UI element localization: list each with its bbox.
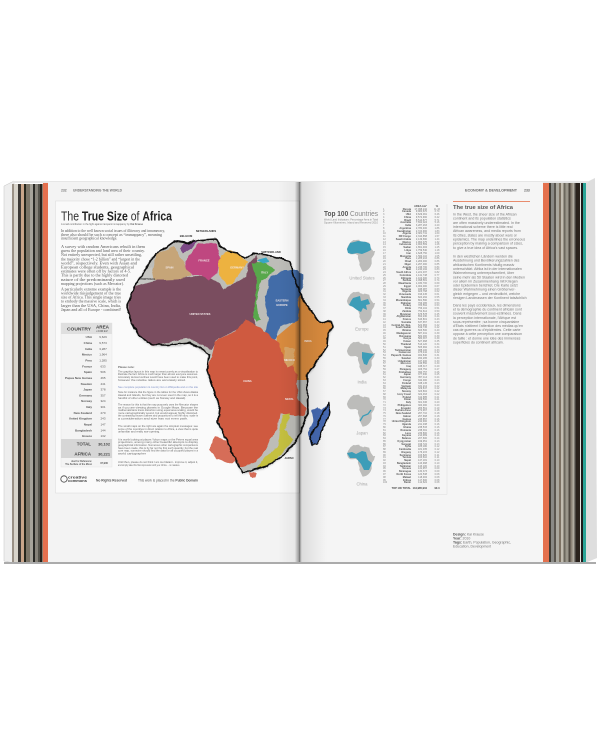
- intro serif text: insufficient geographical knowledge.: [61, 236, 117, 240]
- article heading: The true size of Africa: [453, 205, 514, 211]
- orange rule: [453, 200, 530, 203]
- right page: [301, 182, 543, 562]
- table text: Italy: [86, 405, 92, 409]
- article text: German: dieser Wahrnehmung einen Größenver-: [453, 288, 516, 292]
- please note body text: It is worth looking at places Yukon maps or the Peters equal area: [118, 437, 198, 441]
- please note body text: mathematicians know distortion using equal area scaling, would be: [118, 408, 198, 412]
- top 100 heading: [324, 211, 379, 225]
- data table column headers and frame: 90.3: [434, 486, 440, 490]
- table text: Sweden: [81, 382, 92, 386]
- table text: Germany: [79, 393, 92, 397]
- table background: [61, 323, 112, 467]
- right page edges: stacked page block: [549, 183, 583, 562]
- total band: [61, 439, 112, 458]
- Belgium and Netherlands: [180, 242, 197, 253]
- table text: COUNTRY: [67, 326, 92, 332]
- footer: creative commons: [61, 475, 198, 483]
- left page: [48, 182, 299, 562]
- data table: country names column: Russia Canada USA China Brazil Australia India Argentina Kazakhstan Algeria DR Congo Saudi Arabia Mexico Indonesia Sudan Libya Iran Mongolia Peru Chad Niger Angola Mali South Africa Colombia Ethiopia Bolivia Mauritania Egypt Tanzania Nigeria Venezuela Namibia Mozambique Pakistan Turkey Chile Zambia Myanmar Afghanistan France Somalia Central Afr. Rep. South Sudan Ukraine Madagascar Botswana Kenya Yemen Thailand Spain Turkmenistan Cameroon Papua N. Guinea Sweden Uzbekistan Morocco Iraq Paraguay Zimbabwe Japan Germany Congo Finland Vietnam Malaysia Norway Ivory Coast Poland Oman Italy Philippines Ecuador Burkina Faso New Zealand Gabon Guinea United Kingdom Uganda Ghana Romania Laos Guyana Belarus Kyrgyzstan Senegal Syria Cambodia Uruguay Suriname Tunisia Nepal Bangladesh Tajikistan Greece Nicaragua North Korea Malawi Eritrea Benin: [391, 208, 411, 484]
- article text: French: d'États n'attirent l'attention des médias qu'en: [453, 323, 523, 328]
- article text: French: de taille : et donne une idée des immenses: [453, 336, 521, 340]
- article text: German: afrikanischen Kontinents häufig massiv: [453, 263, 515, 267]
- table text: AFRICA: [74, 452, 92, 456]
- table text: New Zealand: [74, 411, 92, 415]
- article text: French: la perception internationale, l'Afrique est: [453, 316, 516, 320]
- article text: German: vor allem im Zusammenhang mit Kriegen: [453, 279, 518, 283]
- map labels: SPAIN: [165, 266, 174, 270]
- table text: Papua New Guinea: [65, 376, 92, 380]
- main map: Africa with countries overlaid: [127, 229, 340, 477]
- please note body text: however the relative ratios are accurately sized.: [118, 378, 186, 382]
- top 100 heading: Top 100 Countries: [324, 211, 378, 218]
- please note body text: illustrate the fact: Africa is much larger than almost everyone assumes.: [118, 372, 198, 376]
- article text: French: Dans les pays occidentaux, les dimensions: [453, 304, 521, 308]
- please note body text: The small maps on the right are again the simplest messages: see: [118, 424, 198, 428]
- article text: German: unterschätzt. Afrika ist in der internationalen: [453, 267, 522, 271]
- poster title: A small contribution in the fight against rampant immappancy by Kai Krause: [61, 222, 143, 226]
- please note body text: have been made, this is by far not the first such quantity, but the real: [118, 446, 198, 450]
- table text: Nepal: [84, 422, 92, 426]
- map labels: INDIA: [304, 339, 312, 343]
- data table column headers and frame: [392, 204, 447, 494]
- Mexico: [209, 437, 237, 463]
- table text: 1,964: [99, 353, 107, 357]
- article text: German: riesigen Landmassen der Kontinent tatsächlich: [453, 296, 527, 300]
- table text: 243: [100, 417, 106, 421]
- article text: French: superficies du continent africain.: [453, 340, 504, 344]
- credits: Tags: Earth, Population, Geographic,: [453, 540, 511, 544]
- right orange page band: [543, 183, 549, 562]
- article text: English: perception by making a comparison of sizes,: [453, 242, 523, 246]
- article text: German: seine mehr als 50 Staaten wird in den Medien: [453, 275, 525, 279]
- table text: Bangladesh: [75, 428, 92, 432]
- map labels: ITALY: [261, 270, 268, 274]
- please note body text: some of the countries in direct relation to Africa, a view that is quite: [118, 427, 198, 431]
- country area table: [61, 323, 112, 467]
- article text: German: Wahrnehmung unterrepräsentiert, über: [453, 271, 515, 275]
- article text: English: African awareness, and media reports from: [453, 229, 521, 233]
- top 100 heading: World Land Indicators: Percentage Area in Total: [324, 218, 378, 222]
- left page edges: stacked page block: [12, 184, 44, 562]
- right teal page band: [583, 183, 586, 562]
- credits: Year: 2010: [453, 536, 470, 540]
- main map: Africa with countries overlaid: JAPAN: [285, 456, 294, 460]
- intro serif text: European college students, geographical: [61, 266, 134, 270]
- article text: English: to give a true idea of Africa's vast spaces.: [453, 246, 518, 250]
- New Zealand: [248, 473, 257, 477]
- intro serif text: nature of the predominantly used: [61, 278, 125, 282]
- intro serif text: [61, 229, 165, 312]
- Africa base fill: [127, 239, 333, 473]
- data table: rank column: 1 2 3 4 5 6 7 8 9 10 11 12 13 14 15 16 17 18 19 20 21 22 23 24 25 26 27 28 29 30 31 32 33 34 35 36 37 38 39 40 41 42 43 44 45 46 47 48 49 50 51 52 53 54 55 56 57 58 59 60 61 62 63 64 65 66 67 68 69 70 71 72 73 74 75 76 77 78 79 80 81 82 83 84 85 86 87 88 89 90 91 92 93 94 95 96 97 98 99 100: [383, 208, 387, 484]
- table text: 9,629: [99, 335, 107, 339]
- Spain: [152, 246, 192, 280]
- China: [207, 319, 307, 467]
- please note body text: projections, among many other beautiful attempts to display: [118, 440, 199, 444]
- data table column headers and frame: %: [436, 204, 439, 208]
- data table column headers and frame: AREA km²: [414, 204, 427, 208]
- table text: France: [82, 364, 92, 368]
- Sweden, Norway and others: [283, 347, 295, 368]
- table text: AREA: [96, 324, 110, 330]
- map labels: EUROPE: [276, 303, 288, 307]
- map labels: EASTERN: [276, 298, 288, 302]
- small map: China: [347, 445, 375, 486]
- table text: 357: [100, 393, 106, 397]
- small map: India: India: [357, 380, 367, 384]
- map labels: FRANCE: [198, 258, 210, 262]
- right page running header: 233: [524, 188, 530, 192]
- table text: Greece: [82, 434, 92, 438]
- data table column headers and frame: 134,985,904: [413, 486, 428, 490]
- intro serif text: there also should be such a concept as “immappacy”, meaning: [61, 232, 162, 238]
- Switzerland: [257, 257, 269, 263]
- small map: Japan: [347, 395, 375, 436]
- creative commons logo: [61, 475, 88, 483]
- table text: 633: [100, 364, 106, 368]
- please note body text: Until then, please do not think I am too blatant - improve it, adjust it,: [118, 460, 198, 464]
- intro serif text: the majority chose “1-2 billion” and “largest in the: [61, 256, 140, 261]
- article text: French: sous-représentée ; sa bonne cinquantaine: [453, 320, 519, 324]
- please note body text: Accurately derived outlines would have been used to make this point,: [118, 375, 198, 379]
- main map: Africa with countries overlaid: PORTUGAL: [140, 277, 156, 281]
- intro serif text: This is partly due to the highly distorted: [61, 274, 128, 278]
- please note body text: more cartographically sound, but would appear highly distorted.: [118, 411, 198, 415]
- article text: English: are often massively underestimated. In the: [453, 221, 520, 225]
- table text: Japan: [83, 388, 92, 392]
- please note body text: handful of other entities (such as Norway and Hawaii).: [118, 396, 186, 400]
- article text: French: et la démographie du continent africain sont: [453, 308, 522, 312]
- intro serif text: worldwide misjudgement of the true: [61, 292, 121, 296]
- top 100 heading: Square Kilometres, Inland and Reserved 2010: [324, 222, 379, 225]
- table text: Norway: [81, 399, 92, 403]
- map labels: [165, 258, 312, 401]
- please note body text: the contrasting known outlines and proportions to tell the story: scale is: [118, 414, 199, 418]
- table text: 30,221: [98, 452, 111, 456]
- Germany: [218, 250, 248, 285]
- please note body text: See complete population & country list on Wikipedia and on the site: [118, 385, 198, 389]
- Portugal: [134, 267, 153, 287]
- table text: Spain: [84, 370, 92, 374]
- table text: The Surface of the Moon: [65, 463, 93, 466]
- Madagascar island countries: [308, 403, 331, 445]
- map labels: CHINA: [243, 379, 252, 383]
- please note body text: geographical information. Numerous other cartographic comparisons: [118, 443, 199, 447]
- small map: Europe: Europe: [355, 326, 369, 332]
- Eastern Europe: [265, 270, 303, 348]
- table text: 37,900: [100, 461, 109, 465]
- main map: Africa with countries overlaid: BELGIUM: [180, 234, 193, 238]
- table text: 1,285: [99, 358, 107, 362]
- poster title: The True Size of Africa: [61, 210, 173, 224]
- intro serif text: larger than the USA, China, India,: [61, 304, 121, 309]
- small map: India: [347, 342, 375, 384]
- table text: India: [85, 347, 92, 351]
- book gutter shadow, right side: [299, 182, 327, 562]
- please note body text: Hawaii and Islands, but they are not even used in the map, so it is a: [118, 393, 198, 397]
- table text: x 1000 km²: [96, 329, 108, 333]
- book cover and page block: [4, 178, 597, 564]
- table text: USA: [86, 335, 93, 339]
- table text: United Kingdom: [69, 417, 92, 421]
- please note body text: The reason for this is that the map purposely uses the Mercator shapes: [118, 402, 199, 406]
- table text: 132: [100, 434, 106, 438]
- footer: creative commons: This work is placed in the Public Domain: [138, 478, 198, 482]
- table text: 378: [100, 388, 106, 392]
- table text: 441: [100, 382, 106, 386]
- intro serif text: guess the population and land area of their country.: [61, 249, 145, 253]
- article text: German: gleich entgegen – und verdeutlicht, welche: [453, 292, 520, 296]
- map labels: GERMANY: [230, 266, 244, 270]
- article text: English: international scheme there is little real: [453, 225, 513, 229]
- please note body text: The graphics layout in this map is meant purely as a visualization to: [118, 369, 198, 373]
- map labels: NEPAL: [285, 397, 294, 401]
- creative commons logo: commons: [68, 478, 88, 483]
- article text: French: [453, 304, 523, 344]
- Peru: [257, 413, 293, 468]
- table text: 506: [100, 370, 106, 374]
- book gutter shadow, left side: [278, 182, 299, 562]
- table text: Mexico: [82, 353, 92, 357]
- please note body text: Note for instance that the figure in the tables for the USA shows Alaska: [118, 390, 198, 394]
- table text: 324: [100, 399, 106, 403]
- article text: English: epidemics. The map underlines the erroneous: [453, 238, 525, 242]
- article text: English: its cities, states are mostly about wars or: [453, 233, 518, 237]
- left page running header: 232: [61, 188, 67, 192]
- table header band: [61, 323, 112, 334]
- footer: creative commons: No Rights Reserved: [96, 478, 127, 482]
- intro serif text: Not entirely unexpected, but still rather unsettling,: [61, 253, 142, 258]
- please note body text: Please note:: [118, 365, 135, 369]
- right page running header: ECONOMY & DEVELOPMENT: [465, 188, 518, 192]
- intro serif text: In addition to the well known social issues of illiteracy and innumeracy,: [61, 229, 165, 234]
- article text: English: In the West, the sheer size of the African: [453, 212, 517, 216]
- intro serif text: world”, respectively. Even with Asian and: [61, 261, 137, 266]
- India clipped to the outline: [276, 295, 333, 380]
- intro serif text: mapping projections (such as Mercator).: [61, 282, 124, 286]
- article text: German: oder Epidemien berichtet. Die Karte setzt: [453, 284, 518, 288]
- data table column headers and frame: TOP 100 TOTAL: [392, 486, 411, 490]
- credits: Design: Kai Krause: [453, 532, 484, 536]
- table text: 9,573: [99, 341, 107, 345]
- article text: French: oppose à cette perception une comparaison: [453, 332, 522, 336]
- please note body text: and simply take this first-impression with you: Africa ... is massive.: [118, 463, 180, 467]
- data table: percent column: 11.46 6.70 6.46 6.42 5.71 5.16 2.20 1.86 1.83 1.60 1.57 1.44 1.32 1.28 1.25 1.18 1.09 1.05 0.86 0.86 0.85 0.84 0.83 0.82 0.77 0.74 0.74 0.69 0.67 0.63 0.62 0.61 0.55 0.54 0.53 0.53 0.51 0.50 0.45 0.44 0.43 0.43 0.42 0.42 0.40 0.39 0.39 0.39 0.35 0.34 0.34 0.33 0.32 0.31 0.30 0.30 0.30 0.29 0.27 0.26 0.25 0.24 0.23 0.23 0.22 0.22 0.22 0.22 0.21 0.21 0.20 0.20 0.19 0.18 0.18 0.18 0.16 0.16 0.16 0.16 0.16 0.16 0.14 0.14 0.13 0.13 0.12 0.12 0.12 0.11 0.11 0.10 0.10 0.10 0.09 0.09 0.08 0.08 0.08 0.08: [434, 208, 440, 484]
- small map: China: China: [357, 482, 368, 486]
- intro serif text: A particularly extreme example is the: [61, 287, 121, 291]
- please note body text: world cartographer: [118, 451, 146, 455]
- country shapes: [127, 239, 333, 477]
- intro serif text: size of Africa. This single image tries: [61, 296, 122, 300]
- left orange page band: [43, 183, 48, 562]
- article text: German: [453, 254, 527, 300]
- table text: 465: [100, 376, 106, 380]
- printed poster panel: [56, 201, 300, 493]
- Madagascar outline: [311, 403, 331, 445]
- table text: 3,287: [99, 347, 107, 351]
- intro serif text: Japan and all of Europe - combined!: [61, 308, 121, 312]
- credits: [453, 532, 511, 548]
- small map: Japan: Japan: [356, 430, 368, 436]
- main map: Africa with countries overlaid: SWITZERLAND: [261, 250, 281, 254]
- article text: English: [453, 212, 525, 250]
- table text: 30,102: [98, 442, 111, 446]
- France: [185, 243, 220, 280]
- left page running header: UNDERSTANDING THE WORLD: [73, 188, 123, 192]
- table text: [65, 324, 111, 466]
- small map: United States: [347, 240, 375, 280]
- table text: 270: [100, 411, 106, 415]
- United States: [128, 255, 263, 350]
- Italy: [252, 262, 275, 322]
- table text: 144: [100, 428, 106, 432]
- article text: German: In den westlichen Ländern werden die: [453, 254, 513, 258]
- intro serif text: estimates were often off by factors of 4-5.: [61, 270, 131, 274]
- map labels: MEXICO: [284, 358, 295, 362]
- please note body text: as if you are viewing planets in Google Maps. Because the: [118, 405, 198, 409]
- please note body text: core map, someone should find the data for all occupied places in a: [118, 449, 198, 453]
- main map: Africa with countries overlaid: NETHERLANDS: [196, 229, 216, 233]
- please note body text: unfamiliar and really eye-opening.: [118, 430, 160, 434]
- small map: United States: United States: [349, 276, 375, 280]
- table text: TOTAL: [77, 442, 91, 446]
- intro serif text: A survey with random Americans rebuilt in them: [61, 245, 145, 249]
- please note body text: [118, 365, 199, 467]
- creative commons logo: creative: [68, 475, 88, 480]
- intro serif text: to embody the massive scale, which is: [61, 300, 122, 305]
- credits: Education, Development: [453, 544, 491, 548]
- please note body text: a consideration and size has not even path.: [118, 416, 188, 420]
- data table: area column: 17,098,242 9,984,670 9,629,091 9,572,900 8,514,877 7,692,024 3,287,263 2,780,400 2,724,900 2,381,741 2,344,858 2,149,690 1,964,375 1,904,569 1,861,484 1,759,540 1,628,750 1,564,110 1,285,216 1,284,000 1,267,000 1,246,700 1,240,192 1,221,037 1,141,748 1,104,300 1,098,581 1,030,700 1,002,000 945,087 923,768 916,445 824,292 801,590 796,095 783,562 756,102 752,612 676,578 652,230 643,801 637,657 622,984 619,745 603,500 587,041 582,000 580,367 527,968 513,120 505,992 488,100 475,442 462,840 450,295 447,400 446,550 438,317 406,752 390,757 377,930 357,114 342,000 338,145 331,212 329,847 323,802 322,463 312,685 309,500 301,336 300,000 283,561 272,967 267,710 267,668 245,857 242,900 241,038 238,533 238,391 236,800 214,969 207,600 199,951 196,722 185,180 181,035 176,215 163,820 163,610 147,181 143,998 143,100 131,957 130,373 120,538 118,484 117,600 112,622: [414, 208, 427, 484]
- table text: 301: [100, 405, 106, 409]
- map labels: UNITED STATES: [190, 312, 211, 316]
- table text: Just for Reference:: [71, 460, 92, 463]
- article text: English: continent and its population statistics: [453, 217, 511, 221]
- article text: German: Ausdehnung und Bevölkerungszahlen des: [453, 259, 520, 263]
- small map: Europe: [347, 292, 375, 332]
- table text: China: [84, 341, 92, 345]
- article text: French: cas de guerres ou d'épidémies. Cette carte: [453, 328, 521, 332]
- table text: 147: [100, 422, 106, 426]
- table text: Peru: [85, 358, 92, 362]
- Africa outline: [127, 239, 333, 473]
- article text: French: souvent massivement sous-estimées. Dans: [453, 312, 522, 316]
